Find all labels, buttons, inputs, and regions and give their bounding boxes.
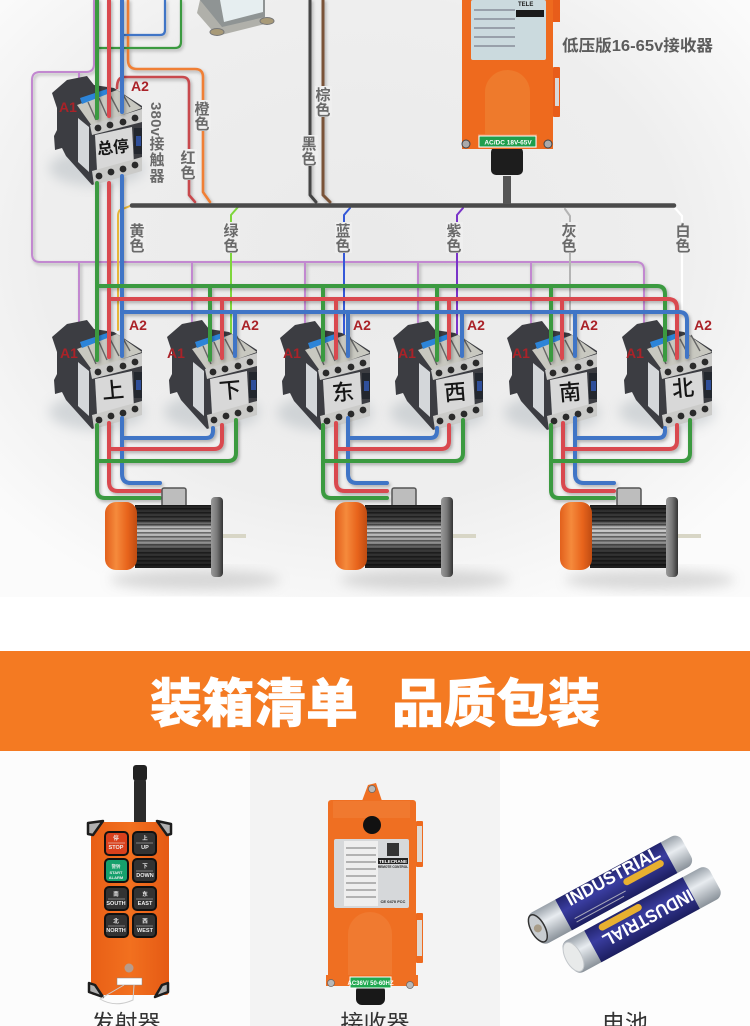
label: 绿色: 色 <box>223 237 239 255</box>
label: 灰色 <box>561 222 578 255</box>
label: 紫色: 色 <box>446 237 462 255</box>
contactor: 下: 下 <box>218 377 242 404</box>
label: 黑色 <box>301 135 318 168</box>
label: 黑色: 色 <box>301 150 317 168</box>
label: 380v接触器: 触 <box>149 152 165 169</box>
label: 灰色: 灰 <box>561 223 577 240</box>
button: NORTH: 北 <box>113 917 119 925</box>
label: 棕色 <box>315 86 332 119</box>
receiver in diagram: TELE <box>518 2 533 8</box>
contactor: 东: A1 <box>283 345 301 361</box>
contactor: 上: A2 <box>129 317 147 333</box>
contactor: 南: 南 <box>558 379 582 406</box>
battery: back <box>522 830 695 947</box>
contactor: 西 <box>390 317 486 431</box>
icon: receiver: AC36V/ 50-60HZ <box>347 981 394 987</box>
button: START ALARM: START <box>109 870 123 875</box>
contactor: 下: A1 <box>167 345 185 361</box>
contactor: 上 <box>49 317 147 430</box>
button: SOUTH: 南 <box>113 890 119 898</box>
label: 棕色: 棕 <box>315 86 331 104</box>
contactor: 下 <box>164 317 260 430</box>
button: DOWN <box>132 858 157 883</box>
label: 380v接触器 <box>147 102 165 185</box>
contactor: 西: 西 <box>443 379 467 406</box>
icon: transformer <box>197 0 274 36</box>
label: 380v接触器: 器 <box>149 168 165 185</box>
label: 低压版16-65v接收器: 低压版16-65v接收器 <box>562 37 713 55</box>
label: 棕色: 色 <box>315 101 331 119</box>
label: 橙色 <box>194 100 211 133</box>
button: WEST: WEST <box>137 928 154 934</box>
button: START ALARM: ALARM <box>109 875 124 880</box>
contactor: 总停 <box>49 76 149 186</box>
button: SOUTH: SOUTH <box>106 901 126 907</box>
battery: front <box>558 864 724 977</box>
motor: middle <box>335 488 510 590</box>
button: UP: UP <box>141 845 149 851</box>
heading: 装箱清单 品质包装: 品质包装 <box>392 662 600 737</box>
label: 380v接触器: 接 <box>149 136 165 153</box>
contactor: 总停: 总停 <box>96 136 130 159</box>
label: 黄色: 黄 <box>129 222 145 240</box>
button: STOP <box>104 831 129 856</box>
contactor: 南 <box>504 317 600 431</box>
contactor: 上: A1 <box>60 345 78 361</box>
motor wires: right <box>551 418 690 498</box>
panel: right product <box>500 751 750 1026</box>
icon: transmitter <box>88 765 171 1004</box>
label: 黑色: 黑 <box>301 136 317 153</box>
label: 白色: 色 <box>675 237 691 255</box>
button: WEST <box>132 913 157 938</box>
contactor: 总停: A1 <box>59 99 77 115</box>
label: 灰色: 色 <box>561 237 577 255</box>
label: 紫色 <box>446 222 463 255</box>
label: 黄色: 色 <box>129 237 145 255</box>
label: 白色 <box>675 222 692 255</box>
contactor: 西: A1 <box>398 345 416 361</box>
motor: left <box>105 488 280 590</box>
contactor: 总停: A2 <box>131 78 149 94</box>
wires: three-phase power <box>97 0 690 498</box>
motor: right <box>560 488 735 590</box>
heading: 装箱清单 品质包装: 装箱清单 <box>150 662 358 737</box>
receiver cable and bus bar <box>132 176 674 206</box>
contactor: 东: A2 <box>353 317 371 333</box>
motor wires: left <box>97 418 236 498</box>
label: 红色: 色 <box>180 164 196 182</box>
button: EAST: EAST <box>138 901 153 907</box>
contactor: 北: 北 <box>671 375 695 402</box>
button: DOWN: DOWN <box>136 873 154 879</box>
label: 黄色 <box>129 222 146 255</box>
label: 橙色: 橙 <box>194 100 210 118</box>
contactor: 东: 东 <box>331 379 355 406</box>
label: 橙色: 色 <box>194 115 210 133</box>
panel: left product <box>0 751 250 1026</box>
button: UP: 上 <box>142 834 148 842</box>
icon: receiver: TELECRANE <box>379 859 407 864</box>
contactor: 北 <box>619 317 715 430</box>
label: 绿色 <box>223 222 240 255</box>
contactor: 北: A2 <box>694 317 712 333</box>
receiver in diagram: AC/DC 18V-65V <box>484 140 532 146</box>
contactor: 下: A2 <box>241 317 259 333</box>
label: 红色 <box>180 149 197 182</box>
button: DOWN: 下 <box>142 863 148 870</box>
button: SOUTH <box>104 886 129 911</box>
button: UP <box>132 831 157 856</box>
contactor: 上: 上 <box>101 377 125 404</box>
label: 绿色: 绿 <box>223 222 239 240</box>
button: EAST: 东 <box>142 890 148 898</box>
button: STOP: STOP <box>109 845 124 851</box>
icon: batteries <box>522 830 724 977</box>
button: START ALARM: 警铃 <box>112 863 121 870</box>
banner: orange header <box>0 651 750 751</box>
button: NORTH <box>104 913 129 938</box>
wires: signal lines below bus <box>118 206 682 345</box>
receiver in diagram <box>462 0 560 175</box>
button: STOP: 停 <box>113 834 119 842</box>
icon: receiver <box>326 783 423 1005</box>
icon: receiver: REMOTE CONTROL <box>378 865 408 869</box>
label: 蓝色: 色 <box>335 237 351 255</box>
wires: supply and control above bus <box>32 0 644 343</box>
battery: front: INDUSTRIAL <box>599 885 696 950</box>
button: NORTH: NORTH <box>106 928 126 934</box>
label: 白色: 白 <box>675 222 691 240</box>
label: 蓝色 <box>335 222 352 255</box>
panel: middle product <box>250 751 500 1026</box>
contactor: 北: A1 <box>626 345 644 361</box>
button: EAST <box>132 886 157 911</box>
label: 蓝色: 蓝 <box>335 223 351 240</box>
battery: back: INDUSTRIAL <box>563 843 664 910</box>
button: WEST: 西 <box>142 918 148 925</box>
button: START ALARM <box>104 858 129 883</box>
contactor: 东 <box>277 317 373 431</box>
contactor: 南: A2 <box>580 317 598 333</box>
contactor: 南: A1 <box>512 345 530 361</box>
panel: wiring diagram background <box>0 0 750 597</box>
label: 紫色: 紫 <box>446 223 462 240</box>
icon: receiver: CE 0470 FCC <box>381 899 406 904</box>
motor wires: middle <box>323 418 463 498</box>
contactor: 西: A2 <box>467 317 485 333</box>
label: 380v接触器: 380v <box>147 102 164 137</box>
label: 红色: 红 <box>180 149 196 167</box>
